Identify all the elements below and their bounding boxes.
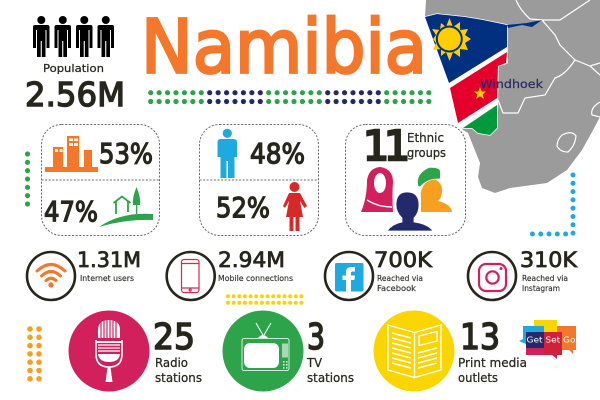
Facebook label line two: Facebook [377, 284, 417, 293]
Instagram label line two: Instagram [522, 284, 560, 293]
Namibia white base [425, 14, 507, 135]
ethnic groups label: Ethnic [407, 130, 444, 145]
icon: newspaper [388, 325, 441, 378]
Instagram value: 310K [520, 248, 578, 272]
title: Namibia [141, 4, 427, 90]
icon: woman with headscarf [361, 167, 393, 212]
panel: ethnic groups [346, 122, 466, 236]
stat: mobile connections [167, 248, 293, 300]
Facebook label: Reached via [377, 274, 423, 283]
mobile connections label: Mobile connections [218, 274, 293, 283]
blue dots [530, 175, 573, 234]
mobile connections value: 2.94M [218, 248, 285, 272]
internet users value: 1.31M [77, 248, 141, 272]
Namibia flag: green [463, 105, 497, 135]
Namibia flag: red [450, 52, 507, 123]
icon: man [218, 129, 237, 178]
green dots [25, 154, 30, 205]
population value: 2.56M [25, 75, 125, 114]
icon: woman [283, 182, 307, 231]
TV label line two: stations [307, 370, 354, 385]
TV label: TV [306, 355, 322, 370]
icon: wifi [37, 264, 65, 287]
stat: internet users [27, 248, 141, 300]
stat: Facebook reach [325, 248, 433, 300]
dotted divider under title [151, 93, 430, 102]
radio value: 25 [153, 317, 195, 358]
print label line two: outlets [458, 370, 498, 385]
rural percentage: 47% [44, 195, 98, 228]
print label: Print media [458, 355, 527, 370]
yellow dots [228, 296, 304, 303]
icon: house and tree [99, 187, 153, 227]
radio label line two: stations [155, 370, 202, 385]
panel: urban and rural [42, 124, 160, 236]
Caprivi strip [507, 20, 542, 28]
Instagram label: Reached via [522, 274, 568, 283]
TV value: 3 [307, 317, 325, 358]
internet users label: Internet users [80, 274, 134, 283]
stat: TV stations [222, 310, 354, 392]
male percentage: 48% [250, 137, 305, 170]
orange dots [30, 329, 39, 380]
ethnic groups number: 11 [363, 122, 410, 170]
panel: gender [200, 124, 318, 236]
print value: 13 [460, 317, 500, 358]
ethnic groups label line two: groups [407, 145, 446, 160]
capital label: Windhoek [480, 77, 543, 91]
land mass [425, 0, 600, 193]
stat: print media outlets [374, 310, 527, 392]
Namibia flag: blue [425, 14, 507, 83]
Facebook value: 700K [374, 248, 433, 272]
icon group: population figures [33, 16, 114, 57]
icon: Facebook [335, 263, 364, 292]
female percentage: 52% [216, 191, 270, 224]
map of southern Africa [425, 0, 600, 193]
icon: navy person [387, 192, 433, 231]
icon: Instagram [479, 264, 506, 291]
icon: phone [182, 260, 199, 292]
icon: television [242, 323, 289, 370]
stat: Instagram reach [468, 248, 578, 300]
icon: orange person with turban [417, 167, 452, 212]
star [474, 87, 486, 99]
logo: Get Set Go Media: Get Set Go [526, 336, 576, 344]
stat: radio stations [68, 310, 202, 392]
population label: Population [43, 62, 104, 75]
icon: microphone [96, 320, 122, 382]
sun [432, 18, 471, 61]
icon: city [45, 136, 98, 172]
logo: Get Set Go Media [519, 320, 576, 359]
borders [498, 0, 600, 152]
urban percentage: 53% [99, 137, 153, 170]
radio label: Radio [155, 355, 188, 370]
